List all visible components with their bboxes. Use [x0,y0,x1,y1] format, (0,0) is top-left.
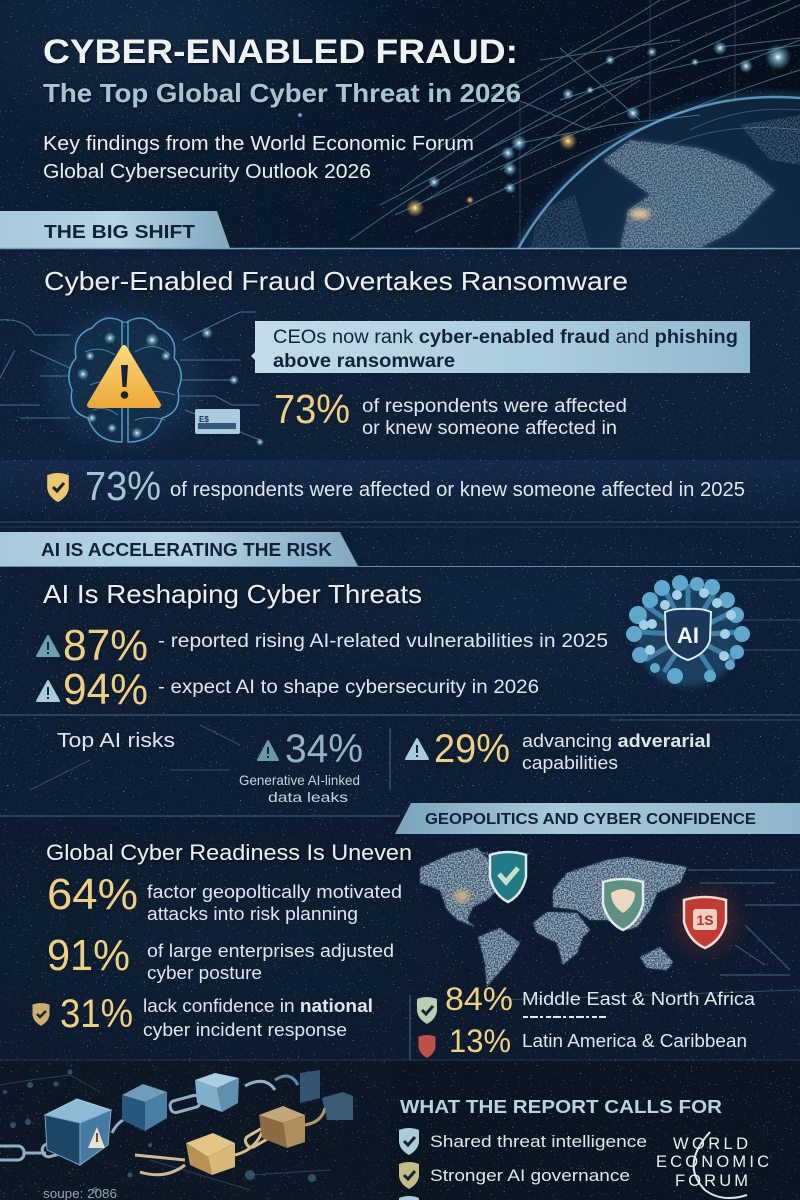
risk: 29% adversarial capabilities: advancing adverarial [522,731,711,751]
stat: 73% with partial sentence: of respondents were affected [362,396,627,417]
stat: 87% [37,621,608,670]
title: CYBER-ENABLED FRAUD: [43,33,518,71]
stat: 31%: 31% [60,992,133,1036]
brain circuit traces [0,312,260,440]
stat: 91%: 91% [47,931,130,980]
heading: AI reshaping threats: AI Is Reshaping Cyber Threats [43,579,422,609]
risk: 29% adversarial capabilities: capabilities [522,753,618,773]
icon: shield [418,1035,436,1058]
intro text: Key findings from the World Economic Forum [43,133,474,155]
background dots [3,1070,316,1193]
stat: 84% Middle East and North Africa: 84% [445,981,513,1017]
list item: shared threat intelligence: Shared threat intelligence [430,1132,647,1151]
icon: triangle [258,741,278,760]
stat: 91% [47,931,394,983]
icon: triangle [37,636,59,656]
banner: the big shift [0,211,800,248]
list item: shared threat intelligence [399,1128,647,1155]
icon: check shield [399,1128,419,1155]
heading: global readiness: Global Cyber Readiness Is Uneven [46,840,412,865]
globe [511,90,800,248]
banner: AI is accelerating the risk [0,532,800,566]
gold cube 1 [186,1133,235,1175]
icon: shield [417,997,437,1024]
stat: 87%: 87% [63,621,148,670]
stat: 94%: - expect AI to shape cybersecurity in 2026 [158,677,539,698]
shield: red 15 [671,886,739,954]
shield: teal check [490,852,526,902]
banner: geopolitics and cyber confidence [395,803,800,834]
risk: 34% generative AI data leaks: 34% [285,727,363,771]
card icon [195,409,240,434]
label: top AI risks: Top AI risks [57,730,175,752]
stat band: 73% in 2025: of respondents were affected or knew someone affected in 2025 [170,479,745,501]
icon: brain with warning triangle [0,310,264,446]
shield: teal and amber bubble [603,879,643,930]
stat: 64%: factor geopoltically motivated [147,882,402,902]
risk: 34% generative AI data leaks: Generative AI-linked [239,772,360,788]
banner: geopolitics and cyber confidence: GEOPOLITICS AND CYBER CONFIDENCE [425,811,756,828]
cube 4 faded [300,1070,353,1120]
cube 1 with warning [45,1099,111,1165]
logo: World Economic Forum: WORLD [673,1135,748,1153]
intro text [43,133,474,183]
risk: 29% adversarial capabilities [406,727,711,773]
stat: 64% [47,870,402,924]
icon: gold shield [47,473,69,502]
shield: red 15: 1S [696,912,714,928]
stat: 64%: attacks into risk planning [147,904,358,924]
banner: AI is accelerating the risk: AI IS ACCELERATING THE RISK [41,540,332,560]
icon: check shield [399,1162,419,1189]
stat: 13% Latin America and Caribbean [418,1023,747,1059]
icon: AI brain shield: AI [677,623,699,648]
stat: 84% Middle East and North Africa: Middle East & North Africa [522,989,756,1009]
stat band: 73% in 2025 [47,463,745,509]
risk: 34% generative AI data leaks [239,727,363,805]
gold cube 2 [259,1106,305,1148]
cube 2 [122,1084,167,1131]
stat: 91%: of large enterprises adjusted [147,941,394,961]
icon: shield [32,1003,50,1026]
heading: fraud overtakes ransomware: Cyber-Enabled Fraud Overtakes Ransomware [44,266,628,296]
callout: CEOs now rank: above ransomware [273,351,455,372]
stat: 73% with partial sentence [274,386,627,439]
stat: 73% with partial sentence: 73% [274,386,350,432]
icon: triangle [406,739,428,759]
banner: the big shift: THE BIG SHIFT [44,222,195,242]
risk: 34% generative AI data leaks: data leaks [268,789,348,805]
map connection lines [688,870,800,975]
stat: 94%: 94% [63,665,148,714]
warning triangle [90,348,158,405]
stat: 31%: lack confidence in national [143,996,373,1016]
continents [420,848,687,987]
stat: 13% Latin America and Caribbean: Latin America & Caribbean [522,1031,747,1051]
callout: CEOs now rank: CEOs now rank cyber-enabled fraud and phishing [273,327,738,348]
stat band: 73% in 2025: 73% [85,463,161,509]
logo: World Economic Forum: ECONOMIC [656,1153,769,1171]
stat: 73% with partial sentence: or knew someone affected in [362,418,617,439]
risk: 29% adversarial capabilities: 29% [434,727,510,771]
callout: CEOs now rank [251,321,750,373]
stat: 13% Latin America and Caribbean: 13% [449,1023,511,1059]
network lines [350,0,800,248]
intro text: Global Cybersecurity Outlook 2026 [43,161,371,183]
cube 3 [195,1073,239,1112]
illustration: broken chain of cubes [0,1070,353,1193]
heading: what the report calls for: WHAT THE REPORT CALLS FOR [400,1096,722,1117]
icon: triangle [37,681,59,701]
world map [420,848,800,987]
icon: third list shield, clipped [399,1196,419,1200]
stat: 84% Middle East and North Africa [417,981,756,1024]
network nodes [297,41,791,217]
brain outline [69,318,181,442]
subtitle: The Top Global Cyber Threat in 2026 [43,78,521,108]
stat: 94% [37,665,539,714]
stat: 31% [32,992,373,1040]
card icon: E$ [199,415,209,424]
header network lines and globe [297,0,800,248]
chain links [0,1076,298,1160]
stat: 91%: cyber posture [147,963,262,983]
logo: World Economic Forum: FORUM [675,1172,748,1190]
logo: World Economic Forum [656,1132,769,1198]
list item: stronger AI governance: Stronger AI governance [430,1166,630,1185]
stat: 64%: 64% [47,870,138,919]
stat: 31%: cyber incident response [143,1020,347,1040]
list item: stronger AI governance [399,1162,630,1189]
icon: AI brain shield [626,575,750,687]
stat: 87%: - reported rising AI-related vulnerabilities in 2025 [158,631,608,652]
